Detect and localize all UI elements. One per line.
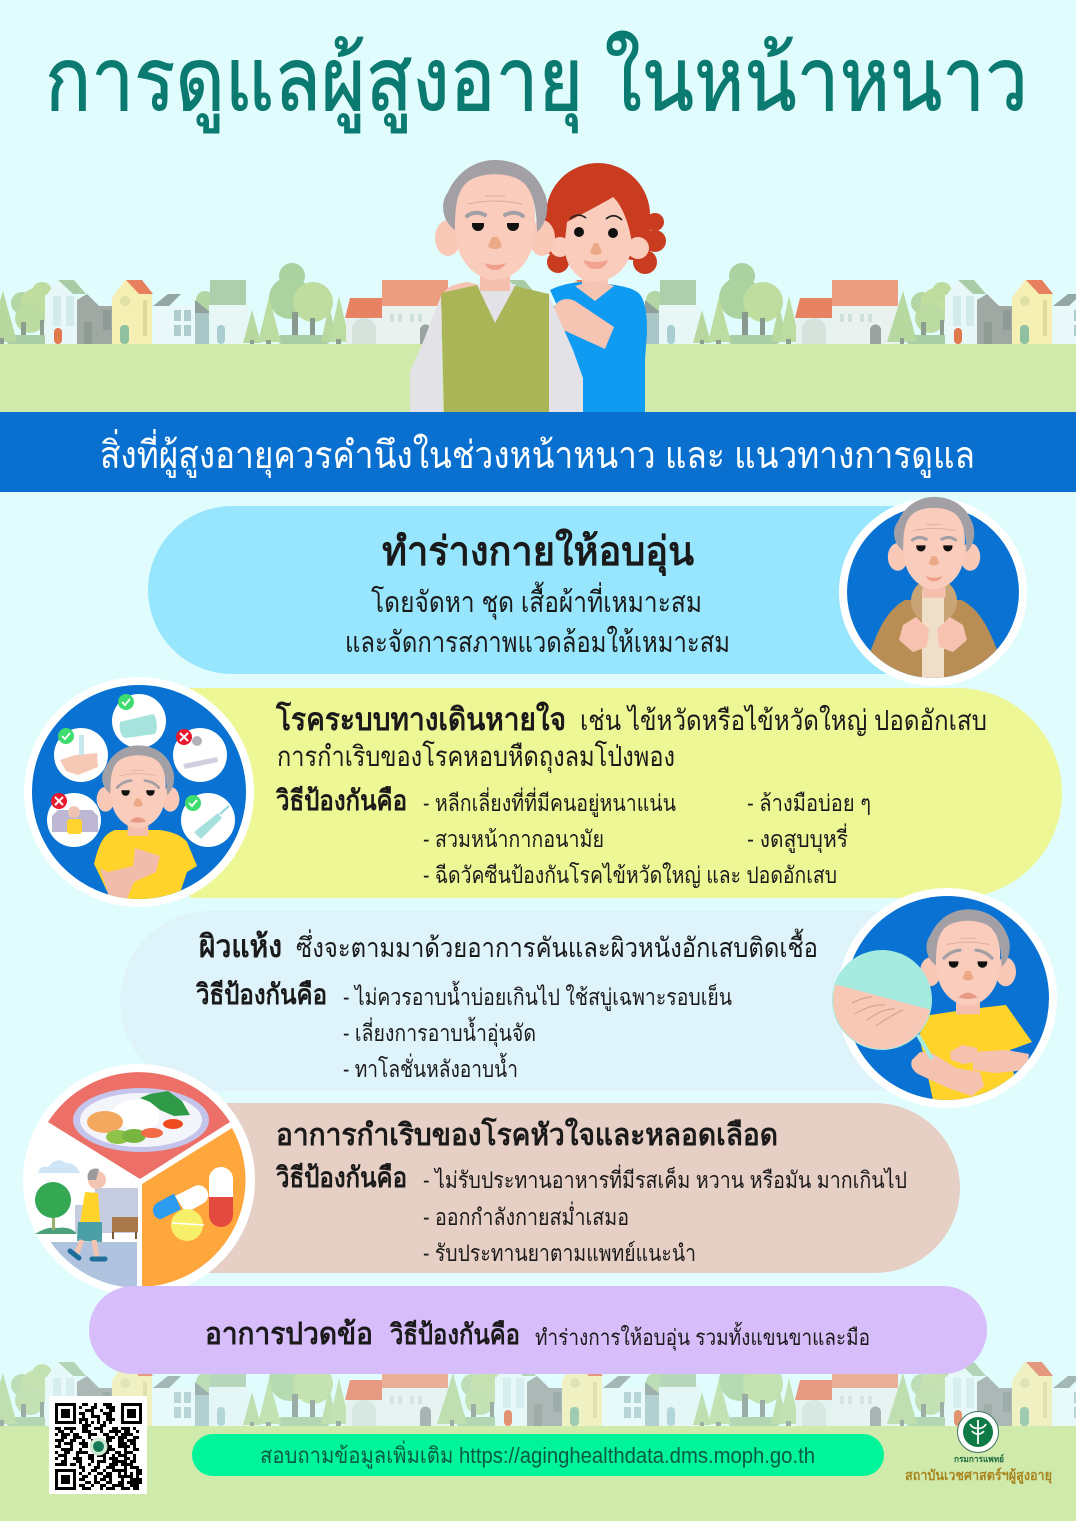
panel: respiratory disease: - ล้างมือบ่อย ๆ <box>747 790 871 816</box>
icon: respiratory prevention circle <box>24 677 254 907</box>
logo: department of medical services: สถาบันเวชศาสตร์ฯผู้สูงอายุ <box>905 1467 1052 1484</box>
banner heading <box>0 412 1076 492</box>
panel: heart and vascular disease: อาการกำเริบของโรคหัวใจและหลอดเลือด <box>276 1116 778 1152</box>
panel: respiratory disease: โรคระบบทางเดินหายใจ <box>275 701 566 737</box>
logo: department of medical services <box>905 1411 1052 1484</box>
panel: heart and vascular disease: - ไม่รับประทานอาหารที่มีรสเค็ม หวาน หรือมัน มากเกินไป <box>423 1164 907 1193</box>
panel: respiratory disease: - งดสูบบุหรี่ <box>747 823 848 853</box>
panel: dry skin: ผิวแห้ง <box>199 929 282 964</box>
panel: keep body warm: และจัดการสภาพแวดล้อมให้เหมาะสม <box>345 625 730 659</box>
bottom town scenery <box>0 1345 1076 1521</box>
panel: joint pain <box>89 1286 987 1374</box>
panel: keep body warm: ทำร่างกายให้อบอุ่น <box>382 528 694 577</box>
QR code <box>49 1396 147 1494</box>
panel: respiratory disease: - สวมหน้ากากอนามัย <box>423 826 604 852</box>
panel: dry skin: - ไม่ควรอาบน้ำบ่อยเกินไป ใช้สบู่เฉพาะรอบเย็น <box>343 981 732 1011</box>
panel: joint pain: ทำร่างการให้อบอุ่น รวมทั้งแขนขาและมือ <box>535 1322 870 1351</box>
top town scenery <box>0 263 1076 412</box>
panel: heart and vascular disease: - ออกกำลังกายสม่ำเสมอ <box>423 1201 629 1230</box>
panel: keep body warm: โดยจัดหา ชุด เสื้อผ้าที่เหมาะสม <box>371 581 702 620</box>
banner heading: สิ่งที่ผู้สูงอายุควรคำนึงในช่วงหน้าหนาว และ แนวทางการดูแล <box>100 429 975 478</box>
panel: keep body warm <box>148 497 1027 690</box>
panel: dry skin <box>120 911 960 1091</box>
panel: heart and vascular disease <box>200 1103 960 1273</box>
panel: heart and vascular disease: วิธีป้องกันคือ <box>275 1162 407 1193</box>
panel: respiratory disease: เช่น ไข้หวัดหรือไข้หวัดใหญ่ ปอดอักเสบ <box>580 704 987 736</box>
panel: respiratory disease: วิธีป้องกันคือ <box>275 785 407 816</box>
panel: respiratory disease: การกำเริบของโรคหอบหืดถุงลมโป่งพอง <box>277 740 675 774</box>
contact pill <box>192 1434 884 1476</box>
illustration: elderly couple <box>410 160 666 412</box>
panel: joint pain: วิธีป้องกันคือ <box>389 1319 520 1350</box>
icon: diet, exercise and medicine circle <box>23 1064 255 1296</box>
panel: dry skin: - เลี่ยงการอาบน้ำอุ่นจัด <box>343 1017 536 1047</box>
panel: heart and vascular disease: - รับประทานยาตามแพทย์แนะนำ <box>423 1240 696 1266</box>
contact pill: สอบถามข้อมูลเพิ่มเติม https://aginghealthdata.dms.moph.go.th <box>260 1440 815 1469</box>
panel: respiratory disease: - ฉีดวัคซีนป้องกันโรคไข้หวัดใหญ่ และ ปอดอักเสบ <box>423 862 837 888</box>
panel: dry skin: ซึ่งจะตามมาด้วยอาการคันและผิวหนังอักเสบติดเชื้อ <box>296 928 818 963</box>
panel: joint pain: อาการปวดข้อ <box>205 1318 373 1351</box>
logo: department of medical services: กรมการแพทย์ <box>954 1453 1004 1464</box>
panel: respiratory disease <box>190 688 1062 898</box>
panel: respiratory disease: - หลีกเลี่ยงที่ที่มีคนอยู่หนาแน่น <box>423 787 676 817</box>
panel: dry skin: วิธีป้องกันคือ <box>195 979 327 1010</box>
panel: dry skin: - ทาโลชั่นหลังอาบน้ำ <box>343 1053 518 1082</box>
icon: dry skin circle <box>830 888 1057 1108</box>
